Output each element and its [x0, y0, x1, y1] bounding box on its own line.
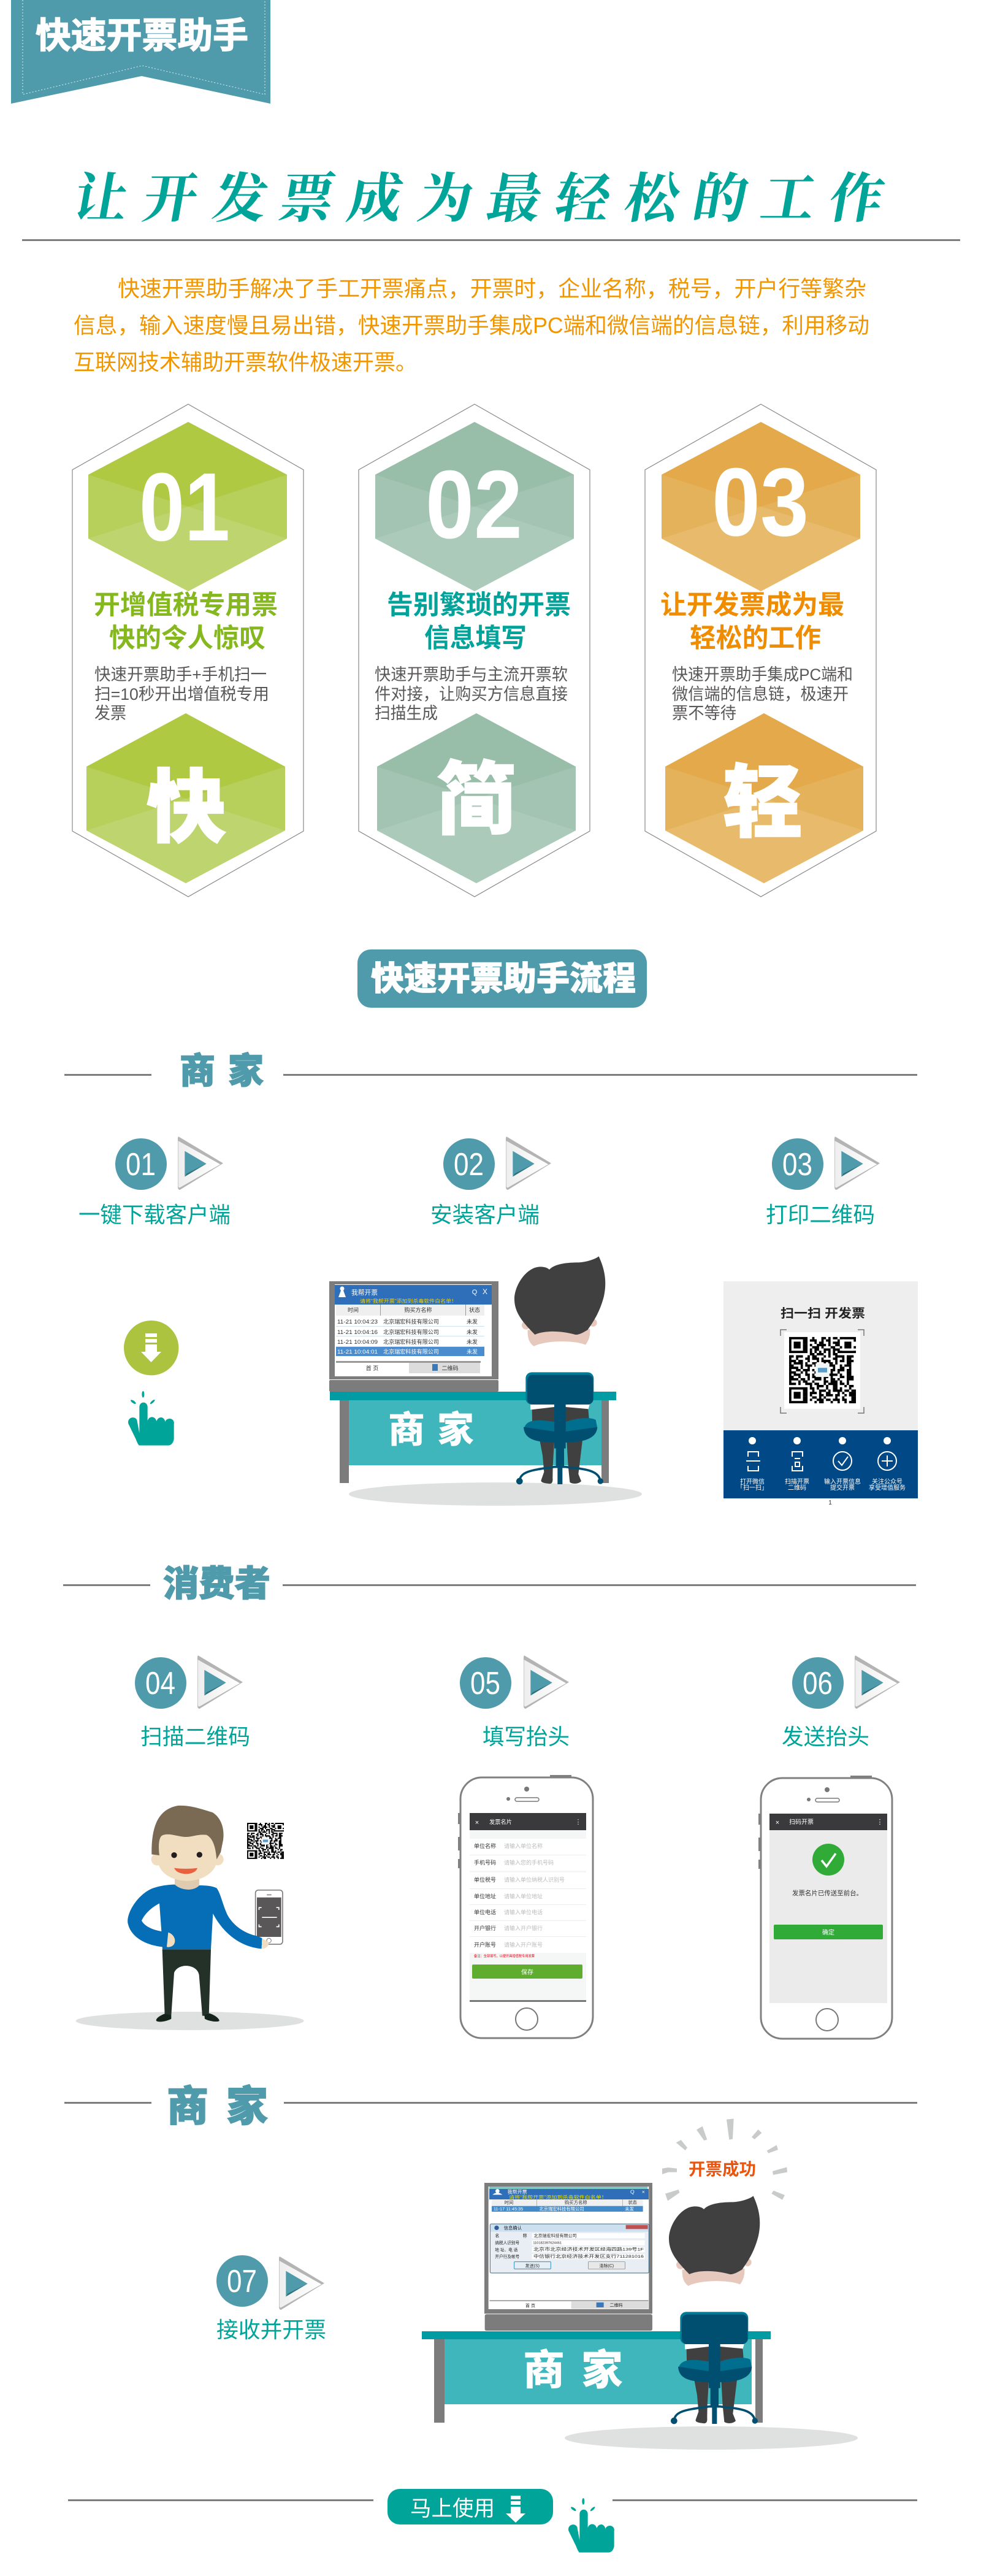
software window on monitor: 未发: [467, 1348, 478, 1355]
QR poster: 打开微信: [740, 1478, 765, 1485]
software window on monitor: 时间: [348, 1306, 359, 1313]
banner ribbon: [11, 0, 270, 104]
phone: success: ⋮: [877, 1819, 883, 1826]
phone: invoice form: 手机号码: [474, 1859, 496, 1866]
software window on monitor: 未发: [467, 1318, 478, 1325]
step 04: 扫描二维码: [140, 1724, 250, 1749]
icon: hexagon 简: [377, 713, 576, 883]
section heading: 消费者: [63, 1564, 916, 1604]
step 07: [216, 2255, 326, 2342]
software window with confirm dialog: 请将“我帮开票”添加到杀毒软件白名单！: [509, 2194, 607, 2199]
icon: hexagon 02: [375, 422, 574, 591]
footer call to action: [68, 2489, 917, 2553]
banner ribbon: 快速开票助手: [36, 16, 248, 56]
callout: success burst: [662, 2118, 787, 2201]
heading: 让开发票成为最: [660, 591, 844, 620]
callout: success burst: 开票成功: [689, 2160, 756, 2179]
software window on monitor: 11-21 10:04:09: [337, 1339, 378, 1345]
software window with confirm dialog: 二维码: [609, 2302, 622, 2307]
software window on monitor: 11-21 10:04:23: [337, 1319, 378, 1325]
phone: invoice form: 请输入单位纳税人识别号: [504, 1876, 565, 1883]
phone: invoice form: 请输入开户银行: [504, 1925, 543, 1931]
illustration: consumer with phone: [76, 1806, 304, 2030]
phone: invoice form: 开户账号: [474, 1941, 496, 1948]
panel: card 03: [645, 404, 876, 897]
software window with confirm dialog: Q: [630, 2189, 635, 2195]
phone: invoice form: ×: [475, 1819, 479, 1827]
footer call to action: 马上使用: [410, 2497, 495, 2521]
phone: invoice form: 请输入单位电话: [504, 1909, 543, 1915]
step 06: [782, 1655, 900, 1749]
section heading: 商家 (second): [64, 2083, 917, 2130]
step 01: 一键下载客户端: [78, 1202, 231, 1227]
software window on monitor: Q: [472, 1289, 478, 1296]
section heading: 消费者: 消费者: [163, 1564, 270, 1604]
step 03: 03: [782, 1147, 812, 1183]
heading: 告别繁琐的开票: [387, 591, 571, 620]
software window on monitor: 首 页: [366, 1365, 378, 1371]
software window with confirm dialog: 状态: [628, 2199, 638, 2205]
icon: hexagon 轻: 轻: [723, 758, 803, 848]
main title: 让开发票成为最轻松的工作: [68, 156, 891, 233]
QR poster: 二维码: [788, 1484, 806, 1492]
software window with confirm dialog: 信息确认: [504, 2225, 522, 2231]
software window on monitor: X: [483, 1287, 487, 1296]
software window on monitor: 未发: [467, 1338, 478, 1345]
step 07: 07: [227, 2264, 257, 2299]
step 02: [430, 1137, 551, 1227]
step 07: 接收并开票: [216, 2317, 326, 2342]
illustration: merchant desk: 商家: [388, 1409, 474, 1451]
step 04: 04: [145, 1666, 175, 1701]
text block: 快速开票助手+手机扫一: [94, 665, 267, 684]
text block: 发票: [94, 704, 126, 723]
software window on monitor: 北京瑞宏科技有限公司: [383, 1338, 439, 1345]
step 06: 06: [803, 1666, 833, 1701]
QR poster: 输入开票信息: [824, 1478, 861, 1485]
software window with confirm dialog: 110182397624461: [533, 2242, 562, 2245]
heading: 信息填写: [424, 624, 527, 653]
panel: card 01: [72, 404, 303, 897]
icon: hexagon 03: [662, 422, 860, 591]
text block: 微信端的信息链，极速开: [672, 685, 849, 703]
phone: invoice form: 备注：全部填写，以便开具增值税专用发票: [474, 1953, 535, 1958]
icon: hexagon 轻: [665, 713, 863, 883]
phone: success: 发票名片已传送至前台。: [792, 1889, 863, 1897]
phone: invoice form: 单位税号: [474, 1876, 496, 1883]
heading: [660, 591, 844, 653]
software window on monitor: 二维码: [441, 1365, 459, 1371]
software window with confirm dialog: 北京瑞宏科技有限公司: [534, 2233, 577, 2239]
QR poster: 扫描开票: [785, 1478, 809, 1485]
illustration: merchant desk: [330, 1392, 642, 1506]
phone: invoice form: 请输入单位名称: [504, 1842, 543, 1849]
intro paragraph: 信息，输入速度慢且易出错，快速开票助手集成PC端和微信端的信息链，利用移动: [74, 313, 869, 338]
software window with confirm dialog: 首 页: [525, 2302, 535, 2308]
icon: hexagon 简: 简: [437, 755, 516, 845]
software window with confirm dialog: 时间: [505, 2199, 513, 2205]
illustration: seated merchant: [514, 1256, 605, 1484]
software window with confirm dialog: 11-17 11:45:35: [494, 2206, 523, 2212]
software window with confirm dialog: 中信银行北京经济技术开发区支行711281016: [533, 2253, 644, 2259]
software window on monitor: 未发: [467, 1328, 478, 1335]
text block: [94, 665, 269, 723]
software window on monitor: 状态: [469, 1306, 480, 1313]
text block: [672, 665, 853, 723]
illustration: seated merchant (second): [669, 2196, 760, 2424]
heading: 开增值税专用票: [94, 591, 278, 620]
step 01: 01: [126, 1147, 156, 1183]
software window on monitor: 请将“我帮开票”添加到杀毒软件白名单！: [360, 1298, 457, 1304]
software window on monitor: 我帮开票: [351, 1289, 378, 1297]
software window on monitor: 北京瑞宏科技有限公司: [383, 1348, 439, 1355]
software window with confirm dialog: 未发: [625, 2206, 635, 2212]
phone: success: 扫码开票: [789, 1818, 814, 1826]
QR poster: 扫一扫 开发票: [781, 1306, 865, 1321]
step 02: 安装客户端: [430, 1202, 540, 1227]
software window with confirm dialog: 地 址、电 话: [495, 2247, 518, 2253]
icon: hexagon 01: 01: [139, 453, 230, 561]
phone: success: 确定: [822, 1928, 834, 1936]
heading: [94, 591, 278, 653]
software window with confirm dialog: 称: [523, 2233, 527, 2239]
step 04: [135, 1655, 250, 1749]
QR poster: [723, 1281, 918, 1506]
software window with confirm dialog: 北京瑞宏科技有限公司: [539, 2206, 584, 2212]
icon: hexagon 快: [86, 713, 285, 883]
QR poster: 1: [828, 1500, 832, 1506]
illustration: merchant desk (second): [422, 2331, 858, 2450]
software window with confirm dialog: 北京市北京经济技术开发区经海四路139号1F: [533, 2247, 644, 2252]
phone: invoice form: ⋮: [575, 1819, 581, 1826]
text block: 快速开票助手与主流开票软: [375, 665, 568, 684]
text block: 扫描生成: [375, 704, 438, 723]
icon: download: [124, 1321, 178, 1375]
software window with confirm dialog: [484, 2183, 652, 2331]
process heading pill: [357, 949, 647, 1008]
phone: invoice form: 请输入开户账号: [504, 1941, 543, 1948]
heading: 快的令人惊叹: [109, 624, 265, 653]
step 05: [460, 1655, 570, 1749]
QR poster: 「扫一扫」: [737, 1484, 768, 1492]
icon: hexagon 02: 02: [426, 451, 522, 559]
QR poster: 享受增值服务: [869, 1484, 906, 1492]
software window on monitor: 11-21 10:04:16: [337, 1329, 378, 1335]
step 01: [78, 1137, 231, 1227]
icon: hexagon 快: 快: [147, 763, 226, 853]
software window with confirm dialog: 购买方名称: [565, 2199, 587, 2205]
software window with confirm dialog: 清除(C): [599, 2263, 614, 2268]
software window with confirm dialog: 发送(S): [525, 2263, 540, 2268]
small QR code: [247, 1823, 284, 1858]
QR poster: 关注公众号: [872, 1478, 903, 1485]
intro paragraph: [74, 276, 869, 375]
phone: invoice form: 保存: [521, 1968, 533, 1976]
QR poster: 提交开票: [830, 1484, 855, 1492]
software window on monitor: [329, 1281, 498, 1392]
step 05: 05: [470, 1666, 500, 1701]
step 05: 填写抬头: [483, 1724, 570, 1749]
phone: success: ×: [776, 1819, 779, 1827]
icon: hexagon 01: [88, 422, 287, 591]
phone: invoice form: 单位地址: [474, 1893, 496, 1899]
phone: invoice form: 请输入您的手机号码: [504, 1859, 554, 1866]
phone: invoice form: 单位名称: [474, 1842, 496, 1849]
text block: 扫=10秒开出增值税专用: [94, 685, 269, 703]
section heading: 商家 (second): 商家: [167, 2083, 268, 2130]
process heading pill: 快速开票助手流程: [371, 960, 636, 997]
text block: [375, 665, 568, 723]
panel: card 02: [359, 404, 590, 897]
icon: hexagon 03: 03: [712, 448, 809, 556]
software window with confirm dialog: 名: [495, 2233, 499, 2239]
phone: invoice form: 发票名片: [489, 1819, 512, 1826]
text block: 票不等待: [672, 704, 736, 723]
section heading: 商家: 商家: [180, 1051, 264, 1091]
software window on monitor: 北京瑞宏科技有限公司: [383, 1328, 439, 1335]
software window on monitor: 购买方名称: [404, 1306, 432, 1313]
heading: 轻松的工作: [690, 624, 821, 653]
step 02: 02: [454, 1147, 484, 1183]
phone: invoice form: 开户银行: [474, 1925, 496, 1931]
phone: success: [758, 1776, 892, 2039]
software window on monitor: 北京瑞宏科技有限公司: [383, 1318, 439, 1325]
software window with confirm dialog: 开户行及帐号: [495, 2253, 520, 2259]
text block: 件对接，让购买方信息直接: [375, 685, 568, 703]
software window with confirm dialog: 我帮开票: [508, 2189, 527, 2195]
intro paragraph: 快速开票助手解决了手工开票痛点，开票时，企业名称，税号，开户行等繁杂: [118, 276, 866, 301]
software window with confirm dialog: 纳税人识别号: [495, 2240, 520, 2245]
section heading: 商家: [64, 1051, 917, 1091]
illustration: merchant desk (second): 商家: [523, 2347, 623, 2394]
software window on monitor: 11-21 10:04:01: [337, 1349, 378, 1355]
icon: hand: [128, 1391, 174, 1446]
text block: 快速开票助手集成PC端和: [672, 665, 853, 684]
software window with confirm dialog: ×: [642, 2189, 645, 2195]
step 06: 发送抬头: [782, 1724, 869, 1749]
phone: invoice form: 单位电话: [474, 1909, 496, 1915]
step 03: [766, 1137, 880, 1227]
intro paragraph: 互联网技术辅助开票软件极速开票。: [74, 350, 417, 375]
heading: [387, 591, 571, 653]
phone: invoice form: [458, 1775, 593, 2038]
step 03: 打印二维码: [766, 1202, 875, 1227]
phone: invoice form: 请输入单位地址: [504, 1893, 543, 1899]
